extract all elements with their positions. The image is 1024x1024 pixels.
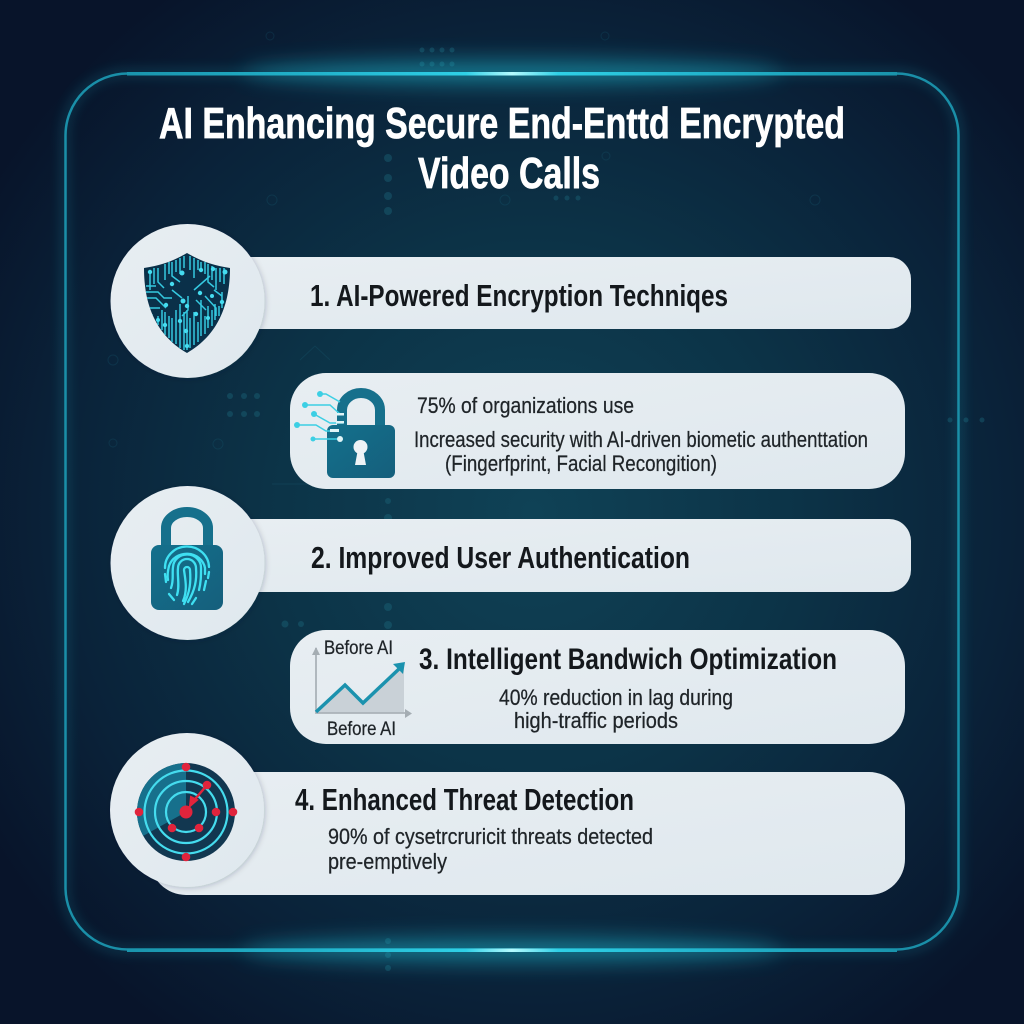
title [159, 99, 845, 198]
panel: bandwidth optimization [290, 630, 905, 744]
glowing frame [65, 58, 959, 964]
section 1: encryption heading bar [210, 257, 911, 329]
heading and stat text: 40% reduction in lag during [499, 685, 733, 710]
title: Video Calls [418, 149, 600, 198]
chart: before/after line [312, 638, 412, 740]
stat text: (Fingerfprint, Facial Recongition) [445, 451, 717, 476]
panel: 75% of organizations [290, 373, 905, 489]
section 2: authentication heading bar: 2. Improved User Authentication [311, 540, 690, 575]
stat text [414, 393, 868, 476]
heading and stat text: 3. Intelligent Bandwich Optimization [419, 643, 837, 676]
chart: before/after line: Before AI [327, 719, 396, 740]
icon: fingerprint padlock [110, 486, 264, 640]
icon: padlock with circuit lines [294, 391, 395, 478]
panel: threat detection: 90% of cysetrcruricit threats detected [328, 824, 653, 849]
section 1: encryption heading bar: 1. AI-Powered Encryption Techniqes [310, 278, 728, 313]
chart: before/after line: Before AI [324, 638, 393, 659]
heading and stat text: high-traffic periods [514, 708, 678, 733]
stat text: 75% of organizations use [417, 393, 634, 418]
icon: circuit shield [110, 224, 264, 378]
title: AI Enhancing Secure End-Enttd Encrypted [159, 99, 845, 148]
panel: threat detection [150, 772, 905, 895]
section 2: authentication heading bar [210, 519, 911, 592]
heading and stat text [419, 643, 837, 733]
icon: radar [110, 733, 264, 887]
stat text: Increased security with AI-driven biometic authenttation [414, 427, 868, 452]
panel: threat detection: pre-emptively [328, 849, 447, 874]
panel: threat detection: 4. Enhanced Threat Detection [295, 782, 634, 817]
